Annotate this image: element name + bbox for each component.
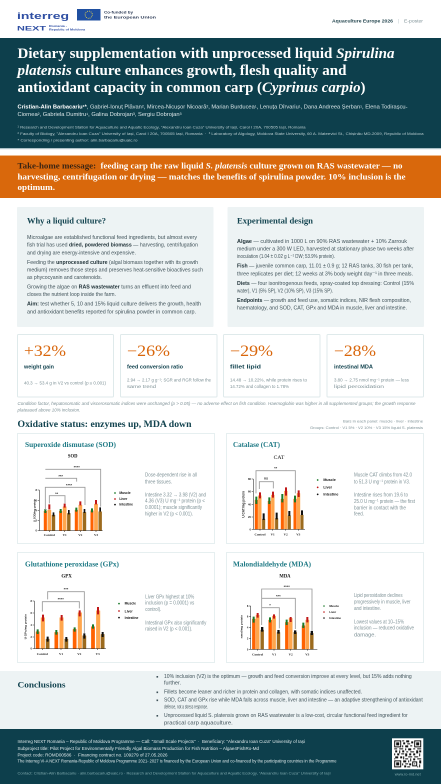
conclusions text: practical carp aquaculture. xyxy=(164,720,233,726)
take-home message banner: harvesting, centrifugation or drying — matches the benefits of spirulina powder. 10% inclusion is the xyxy=(18,171,406,181)
bar legend note: Groups: Control · V1 5% · V2 10% · V3 15% liquid S. platensis xyxy=(310,425,423,430)
note on condition indices: Condition factor, hepatosomatic and viscerosomatic indices were unchanged (p > 0.05) — no adverse effect on fish condition. Haemoglobin was higher in all supplemented groups; the growth response xyxy=(18,401,416,406)
body text: Fish — juvenile common carp, 11.01 ± 0.9 g; 12 RAS tanks, 30 fish per tank, xyxy=(237,264,413,270)
conclusions text xyxy=(164,674,423,726)
heading: Why a liquid culture? xyxy=(27,217,106,226)
body text: Aim: test whether 5, 10 and 15% liquid culture delivers the growth, health xyxy=(27,302,201,308)
side text: to 51.3 U mg⁻¹ protein in V3. xyxy=(354,479,410,485)
conference label: Aquaculture Europe 2026 xyxy=(332,18,393,23)
bar chart: CAT: Control xyxy=(254,533,266,537)
chart legend: Liver xyxy=(329,610,337,614)
side text: Lipid peroxidation declines xyxy=(354,593,403,599)
panel: experimental design xyxy=(228,207,424,327)
bar chart: GPX: GPX xyxy=(61,574,72,579)
bar chart: CAT: 80 xyxy=(248,477,252,481)
side text xyxy=(145,473,206,517)
bar chart: CAT: U CAT/mg protein xyxy=(241,491,245,518)
side text: feed. xyxy=(354,512,364,518)
footer xyxy=(0,729,441,784)
affiliations xyxy=(18,125,425,142)
bar chart: SOD: 6 xyxy=(36,498,38,502)
body text: as phycocyanin and carotenoids. xyxy=(27,275,102,281)
bar chart: CAT xyxy=(241,455,338,537)
stat card: feed conversion ratio: −26% xyxy=(127,343,170,360)
bullet squares xyxy=(156,676,158,717)
chart legend: Liver xyxy=(323,486,333,490)
authors: Cristian-Alin Barbacariu¹* , Gabriel-Ionuț Plăvan², Mircea-Nicușor Nicoară², Marian Burducea¹, Lenuța Dîrvariu¹, Dana Andreea Șerban¹, Elena Todirașcu- xyxy=(18,104,408,110)
heading: Glutathione peroxidase (GPx) xyxy=(25,559,119,568)
body text: and antioxidant benefits reported for spirulina powder in common carp. xyxy=(27,309,196,315)
bar chart: SOD: ** xyxy=(55,491,59,496)
logo: Interreg: interreg xyxy=(17,11,69,22)
affiliations: ¹ Research and Development Station for Aquaculture and Aquatic Ecology, "Alexandru Ioan Cuza" University of Iași, Carol I 20A, 700505 Iași, Romania xyxy=(18,125,307,129)
side text: Lowest values at 10–15% xyxy=(354,619,404,625)
body text: Algae — cultivated in 1000 L on 90% RAS wastewater + 10% Zarrouk xyxy=(237,239,407,245)
bar chart: CAT: ns xyxy=(264,477,268,481)
chart legend: Liver xyxy=(119,497,128,501)
stat card: feed conversion ratio: same trend xyxy=(127,384,157,389)
bar chart: GPX xyxy=(24,574,138,656)
panel: why a liquid culture xyxy=(17,207,214,327)
chart legend: Intestine xyxy=(323,493,338,497)
bar chart: MDA xyxy=(239,574,341,656)
bar chart: MDA: * xyxy=(269,603,271,608)
stat card: intestinal MDA xyxy=(327,334,424,397)
bar chart: SOD: V2 xyxy=(78,533,83,537)
stat card: fillet lipid: fillet lipid xyxy=(230,365,262,371)
bar chart: MDA: Control xyxy=(252,652,263,656)
bar chart: MDA: 0 xyxy=(247,647,249,651)
stat card: intestinal MDA: lipid peroxidation xyxy=(334,384,385,389)
side text: Intestine 3.32 → 3.98 (V2) and xyxy=(145,492,206,498)
conclusions band xyxy=(0,671,441,729)
body text: Microalgae are established functional feed ingredients, but almost every xyxy=(27,235,197,241)
stat card: fillet lipid: 14.72% and collagen to 1.78% xyxy=(230,384,289,389)
body text: Diets — four isonitrogenous feeds, spray-coated top dressing: Control (15% xyxy=(237,281,414,287)
chart legend xyxy=(317,478,338,497)
title band xyxy=(0,38,441,149)
body text: three replicates per diet; 12 weeks at 3% body weight day⁻¹ in three meals. xyxy=(237,271,413,277)
heading: Superoxide dismutase (SOD) xyxy=(25,440,116,449)
logo: NEXT: Republic of Moldova xyxy=(49,28,86,32)
side text: inclusion (p = 0.0001) vs xyxy=(145,601,195,607)
body text: Endpoints — growth and feed use, somatic indices, NIR flesh composition, xyxy=(237,298,411,304)
website label: www.ro-md.net xyxy=(395,771,422,776)
project information: Interreg NEXT Romania – Republic of Moldova Programme — Call: "Small Scale Projects" · Beneficiary: "Alexandru Ioan Cuza" University of Iași xyxy=(18,739,305,744)
bar chart: GPX: 0 xyxy=(31,647,33,651)
bar chart: SOD: 2 xyxy=(36,519,38,523)
bar chart: GPX: **** xyxy=(58,597,64,602)
stat card: intestinal MDA: intestinal MDA xyxy=(334,365,373,371)
side text: Intestine rises from 19.6 to xyxy=(354,492,408,498)
bar chart: MDA: 4 xyxy=(247,626,249,630)
body text: closes the nutrient loop inside the farm. xyxy=(27,292,116,298)
bar chart: SOD: 4 xyxy=(36,509,38,513)
conference label: | xyxy=(398,18,399,23)
bar chart: GPX: V2 xyxy=(77,652,82,656)
panel: CAT xyxy=(226,434,424,544)
body text: Growing the algae on RAS wastewater turns an effluent into feed and xyxy=(27,285,191,291)
bar chart: GPX: 2 xyxy=(31,635,33,639)
stat card: fillet lipid: −29% xyxy=(230,343,273,360)
logo text: co-funded: Co-funded by xyxy=(104,10,133,14)
body text: fish trial has used dried, powdered biomass — harvesting, centrifugation xyxy=(27,243,198,249)
chart legend: Liver xyxy=(125,609,133,613)
project information: The Interreg VI-A NEXT Romania-Republic of Moldova Programme 2021- 2027 is financed by the European Union and co-financed by the participating countries in the Programme xyxy=(18,758,337,763)
body text: and drying are energy-intensive and expensive. xyxy=(27,250,136,256)
header logo bar xyxy=(17,9,423,32)
side text: higher in V2 (p < 0.001). xyxy=(145,511,193,517)
authors xyxy=(18,104,408,118)
chart legend: Muscle xyxy=(125,602,136,606)
chart legend: Intestine xyxy=(119,503,133,507)
bar chart: CAT: V1 xyxy=(271,533,275,537)
stat card: fillet lipid: 14.48 → 10.22%, while protein rises to xyxy=(230,377,308,382)
project information: Project code: ROMD00586 · Financing contract no. 109279 of 27.05.2026 xyxy=(18,752,168,757)
bar chart: SOD: Control xyxy=(44,533,55,537)
bar chart: CAT: CAT xyxy=(274,455,285,461)
conclusions text: Fillets become leaner and richer in protein and collagen, with somatic indices unaffected. xyxy=(164,689,362,695)
heading: Conclusions xyxy=(18,679,66,689)
bar chart: MDA: 6 xyxy=(247,615,249,619)
side text xyxy=(354,473,415,518)
side text: 4.36 (V3) U mg⁻¹ protein (p < xyxy=(145,499,205,505)
logo text: co-funded xyxy=(104,10,156,20)
body text: medium under a 300 W LED, harvested at stationary phase two weeks after xyxy=(237,246,414,252)
bar legend note: Bars in each panel: muscle · liver · intestine xyxy=(343,419,424,424)
side text: control). xyxy=(145,607,161,613)
title: antioxidant capacity in common carp ( Cyprinus carpio) xyxy=(18,80,366,96)
bar chart: SOD: 8 xyxy=(36,488,38,492)
logo: NEXT: Romania - xyxy=(49,24,67,28)
stat card: weight gain: 40.3 → 53.4 g in V2 vs control (p ≤ 0.001) xyxy=(24,381,107,386)
body text xyxy=(27,235,203,315)
conclusions text: Unprocessed liquid S. platensis grown on RAS wastewater is a low-cost, circular functional feed ingredient for xyxy=(164,713,408,719)
chart legend xyxy=(323,604,341,620)
bar chart: GPX: U GPx/mg protein xyxy=(24,614,28,639)
bar chart: CAT: 0 xyxy=(250,527,252,531)
stat card: weight gain xyxy=(18,334,114,397)
QR code xyxy=(392,738,423,769)
side text: progressively in muscle, liver xyxy=(354,599,411,605)
heading: Experimental design xyxy=(237,217,313,226)
side text: 0.0001); muscle significantly xyxy=(145,505,202,511)
note on condition indices xyxy=(16,401,416,412)
conclusions text: further. xyxy=(164,681,181,687)
panel: MDA xyxy=(226,552,424,662)
bar chart: GPX: V1 xyxy=(59,652,63,656)
side text: barrier in contact with the xyxy=(354,505,406,511)
bar chart: SOD: 0 xyxy=(36,529,38,533)
contact line: Contact: Cristian-Alin Barbacariu · alin.barbacariu@uaic.ro · Research and Development Station for Aquaculture and Aquatic Ecology, "Alexandru Ioan Cuza" University of Iași xyxy=(18,771,331,776)
side text: Muscle CAT climbs from 42.0 xyxy=(354,473,412,479)
side text: three tissues. xyxy=(145,479,172,485)
stat card: feed conversion ratio: 2.94 → 2.17 g g⁻¹; SGR and RGR follow the xyxy=(127,377,212,382)
side text xyxy=(354,593,414,638)
side text: Dose-dependent rise in all xyxy=(145,473,197,479)
bar chart: GPX: 8 xyxy=(31,599,33,603)
panel: GPx xyxy=(18,552,214,662)
bar chart: GPX: 6 xyxy=(31,611,33,615)
side text: damage. xyxy=(354,632,376,638)
heading: Malondialdehyde (MDA) xyxy=(233,559,311,568)
bar chart: SOD: U SOD/mg protein xyxy=(33,499,37,522)
logo: NEXT xyxy=(17,24,86,32)
bar chart: MDA: 8 xyxy=(247,604,249,608)
side text: Intestinal GPx also significantly xyxy=(145,620,207,626)
take-home message banner: optimum. xyxy=(18,182,55,192)
title: Dietary supplementation with unprocessed liquid Spirulina xyxy=(18,46,394,62)
side text: inclusion — reduced oxidative xyxy=(354,626,414,632)
body text: water), V1 (5% SP), V2 (10% SP), V3 (15% SP). xyxy=(237,289,333,295)
bar chart: CAT: 60 xyxy=(248,490,252,494)
stat card: feed conversion ratio: feed conversion ratio xyxy=(127,365,184,371)
stat card: fillet lipid xyxy=(224,334,320,397)
panel: SOD xyxy=(18,434,214,544)
chart legend: Muscle xyxy=(119,491,131,495)
logo: EU flag xyxy=(77,9,100,20)
project information xyxy=(18,739,337,763)
chart legend: Intestine xyxy=(125,616,138,620)
logo: NEXT: NEXT xyxy=(17,26,46,32)
body text xyxy=(237,239,414,312)
authors: Ciornea², Gabriela Dumitru¹, Galina Dobrojan³, Sergiu Dobrojan³ xyxy=(18,112,182,118)
stat card: feed conversion ratio xyxy=(120,334,217,397)
body text: haematology, and SOD, CAT, GPx and MDA in muscle, liver and intestine. xyxy=(237,306,407,312)
note on condition indices: plateaued above 10% inclusion. xyxy=(16,408,80,412)
chart legend: Intestine xyxy=(329,616,341,620)
bar chart: MDA: nmol/mg protein xyxy=(239,615,243,638)
bar chart: MDA: V1 xyxy=(272,652,276,656)
side text: and intestine. xyxy=(354,606,381,612)
conclusions text: SOD, CAT and GPx rise while MDA falls across muscle, liver and intestine — an adaptive strengthening of antioxidant xyxy=(164,697,423,703)
affiliations: ² Faculty of Biology, "Alexandru Ioan Cuza" University of Iași, Carol I 20A, 700505 Iași, Romania · ³ Laboratory of Algology, Moldova State University, 60 A. Mateevici St., Chișinău MD-2009, Republic of Moldova xyxy=(18,132,425,136)
title: platensis culture enhances growth, flesh quality and xyxy=(15,63,347,79)
conference label xyxy=(332,18,423,23)
bar chart: CAT: ** xyxy=(274,466,278,471)
bar chart: SOD: *** xyxy=(58,473,63,478)
bar chart: MDA: MDA xyxy=(279,574,291,579)
bar legend note xyxy=(310,419,424,430)
stat card: weight gain: +32% xyxy=(24,343,66,360)
stat card: intestinal MDA: −28% xyxy=(334,343,376,360)
take-home message banner: Take-home message: feeding carp the raw liquid S. platensis culture grown on RAS wastewater — no xyxy=(18,161,402,171)
stat card: intestinal MDA: 3.80 → 2.75 nmol mg⁻¹ protein — less xyxy=(334,377,410,382)
side text: 25.0 U mg⁻¹ protein — the first xyxy=(354,499,415,505)
body text: medium) removes those steps and preserves heat-sensitive bioactives such xyxy=(27,268,203,274)
bar chart: SOD xyxy=(33,454,133,537)
bar chart: GPX: 4 xyxy=(31,623,33,627)
bar chart: MDA: V2 xyxy=(289,652,293,656)
side text: Liver GPx highest at 10% xyxy=(145,594,195,600)
bar chart: CAT: 40 xyxy=(248,502,252,506)
bar chart: MDA: V3 xyxy=(305,652,310,656)
bar chart: SOD: SOD xyxy=(68,454,78,459)
stat card: weight gain: weight gain xyxy=(23,365,55,371)
bar chart: CAT: V2 xyxy=(284,533,288,537)
heading: Catalase (CAT) xyxy=(233,440,280,449)
bar chart: GPX: Control xyxy=(37,652,48,656)
bar chart: CAT: 20 xyxy=(248,515,252,519)
bar chart: SOD: V3 xyxy=(94,533,98,537)
conclusions text: 10% inclusion (V2) is the optimum — growth and feed conversion improve at every level, but 15% adds nothing xyxy=(164,674,412,680)
bar chart: SOD: **** xyxy=(74,464,80,469)
logo text: co-funded: the European Union xyxy=(104,16,156,20)
bar chart: SOD: **** xyxy=(66,482,73,487)
bar chart: GPX: *** xyxy=(64,587,69,592)
bar chart: MDA: *** xyxy=(276,593,281,598)
chart legend xyxy=(118,602,138,620)
chart legend: Muscle xyxy=(329,604,339,608)
chart legend: Muscle xyxy=(323,478,336,482)
bar chart: SOD: V1 xyxy=(63,533,67,537)
bar chart: MDA: **** xyxy=(284,584,290,589)
section heading: oxidative status: Oxidative status: enzymes up, MDA down xyxy=(18,419,192,430)
bar chart: GPX: V3 xyxy=(96,652,100,656)
bar chart: CAT: V3 xyxy=(296,533,301,537)
body text: Feeding the unprocessed culture (algal biomass together with its growth xyxy=(27,260,198,266)
conference label: E-poster xyxy=(404,18,423,23)
take-home message banner xyxy=(0,155,441,198)
affiliations: * Corresponding / presenting author: alin.barbacariu@uaic.ro xyxy=(18,138,138,142)
chart legend xyxy=(114,491,133,507)
conclusions text: defence, not a stress response. xyxy=(164,705,208,711)
project information: Subproject title: Pilot Project for Environmentally Friendly Algal Biomass Production for Fish Nutrition – Algae4FishRo-Md xyxy=(18,746,259,751)
body text: inoculation (1.04 ± 0.02 g L⁻¹ DW; 53.9% protein). xyxy=(237,254,335,260)
side text xyxy=(145,594,207,633)
bar chart: MDA: 2 xyxy=(247,636,249,640)
side text: raised in V2 (p < 0.001). xyxy=(145,627,192,633)
title xyxy=(15,46,395,96)
